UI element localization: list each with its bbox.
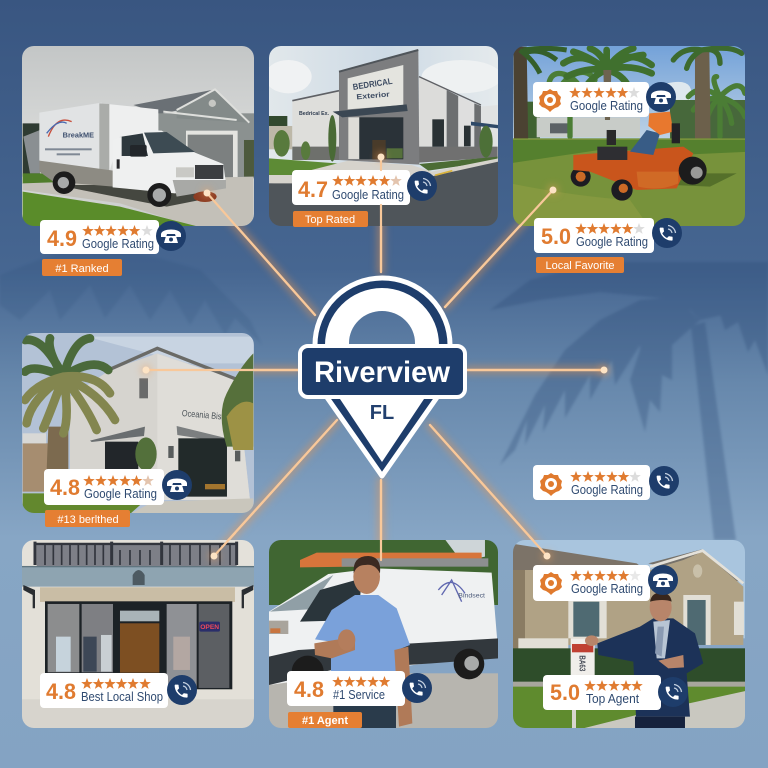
photo: riding mower and palms	[510, 40, 750, 228]
photo: agent and house: BA63	[577, 655, 587, 671]
icon: phone	[407, 171, 437, 201]
photo: office building: Exterior	[356, 89, 390, 101]
photo: technician and van: Bindsect	[458, 593, 485, 599]
rating card: seal Google Rating	[533, 565, 650, 601]
rating card: 4.7 Google Rating: Google Rating	[332, 187, 404, 202]
tag: #1 Ranked: #1 Ranked	[55, 263, 109, 275]
panel: delivery truck	[20, 40, 260, 276]
rating card: 4.8 Google Rating: 4.8	[50, 475, 80, 500]
rating card: 4.8 Google Rating: Google Rating	[84, 486, 157, 501]
photo: office building: BEDRICAL	[352, 76, 394, 92]
panel: landscaping	[510, 40, 750, 273]
photo: agent and house	[510, 538, 750, 730]
rating card: 5.0 Top Agent	[543, 675, 661, 710]
photo: shop front	[20, 538, 260, 729]
rating card: 4.8 Best Local Shop: Best Local Shop	[81, 689, 163, 704]
rating card: 4.8 Google Rating	[44, 469, 164, 505]
tag: Top Rated: Top Rated	[305, 214, 355, 226]
rating card: 5.0 Google Rating: Google Rating	[576, 234, 648, 249]
rating card: 4.9 Google Rating: 4.9	[47, 226, 77, 251]
photo: shop front: OPEN	[200, 624, 219, 631]
pin body	[315, 278, 450, 476]
photo: office building: Bedrical Ex.	[299, 111, 329, 117]
tag: Top Rated	[293, 211, 368, 227]
rating card: 4.8 #1 Service: #1 Service	[333, 687, 385, 702]
floating rating card: Google Rating	[533, 465, 650, 500]
photo: white building	[20, 330, 260, 517]
panel: real estate agent	[510, 538, 750, 730]
tag: berthed	[45, 510, 130, 527]
ray lines	[146, 156, 604, 560]
tag: Local Favorite	[536, 257, 624, 273]
photo: box truck and house: BreakME	[63, 130, 94, 139]
ray glow	[146, 156, 604, 560]
rating card: 4.8 Best Local Shop: 4.8	[46, 679, 76, 704]
icon: telephone	[162, 470, 192, 500]
rating card: seal Google Rating: Google Rating	[570, 98, 643, 113]
panel: local shop	[20, 538, 260, 729]
rating card: 5.0 Top Agent: 5.0	[550, 680, 580, 705]
photo: office building	[265, 40, 505, 230]
connector rays	[146, 156, 604, 560]
tag: #1 Agent	[288, 712, 362, 728]
icon: phone	[652, 218, 682, 248]
icon: telephone	[648, 565, 678, 595]
icon: orange seal	[540, 572, 562, 595]
panel: service van	[265, 538, 505, 730]
label: FL: FL	[370, 402, 394, 424]
rating card: 4.8 #1 Service	[287, 671, 405, 706]
rating card: 4.9 Google Rating: Google Rating	[82, 236, 154, 251]
tag: berthed: #13 berlthed	[57, 514, 119, 526]
floating rating card: Google Rating: Google Rating	[571, 482, 643, 497]
rating card: 5.0 Google Rating	[534, 218, 654, 253]
icon: phone floating	[649, 466, 679, 496]
central map pin: Riverview FL	[300, 278, 465, 476]
icon: orange seal	[539, 89, 561, 112]
panel: commercial building	[265, 40, 505, 230]
tag: #1 Ranked	[42, 259, 122, 276]
icon: telephone	[646, 82, 676, 112]
rating card: 5.0 Google Rating: 5.0	[541, 224, 571, 249]
rating card: 4.9 Google Rating	[40, 220, 159, 254]
ray end dots	[141, 152, 609, 561]
tag: Local Favorite: Local Favorite	[545, 260, 615, 272]
rating card: seal Google Rating: Google Rating	[571, 581, 643, 596]
rating card: 4.7 Google Rating	[292, 170, 410, 205]
tag: #1 Agent: #1 Agent	[302, 715, 348, 727]
rating card: 4.8 Best Local Shop	[40, 673, 168, 708]
palm silhouettes background	[0, 250, 768, 540]
icon: phone	[658, 677, 688, 707]
rating card: 5.0 Top Agent: Top Agent	[586, 691, 639, 706]
rating card: 4.7 Google Rating: 4.7	[298, 177, 328, 202]
panel: storefront with palm	[20, 330, 260, 527]
label: Riverview	[300, 346, 465, 397]
icon: telephone	[156, 221, 186, 251]
rating card: seal Google Rating	[533, 82, 649, 117]
icon: orange seal	[540, 473, 562, 496]
icon: phone	[167, 675, 197, 705]
icon: phone	[402, 673, 432, 703]
photo: box truck and house	[20, 40, 260, 233]
photo: technician and van	[265, 538, 505, 730]
label: Riverview: Riverview	[314, 356, 451, 389]
photo: white building: Oceania Bist	[181, 408, 224, 422]
rating card: 4.8 #1 Service: 4.8	[294, 677, 324, 702]
